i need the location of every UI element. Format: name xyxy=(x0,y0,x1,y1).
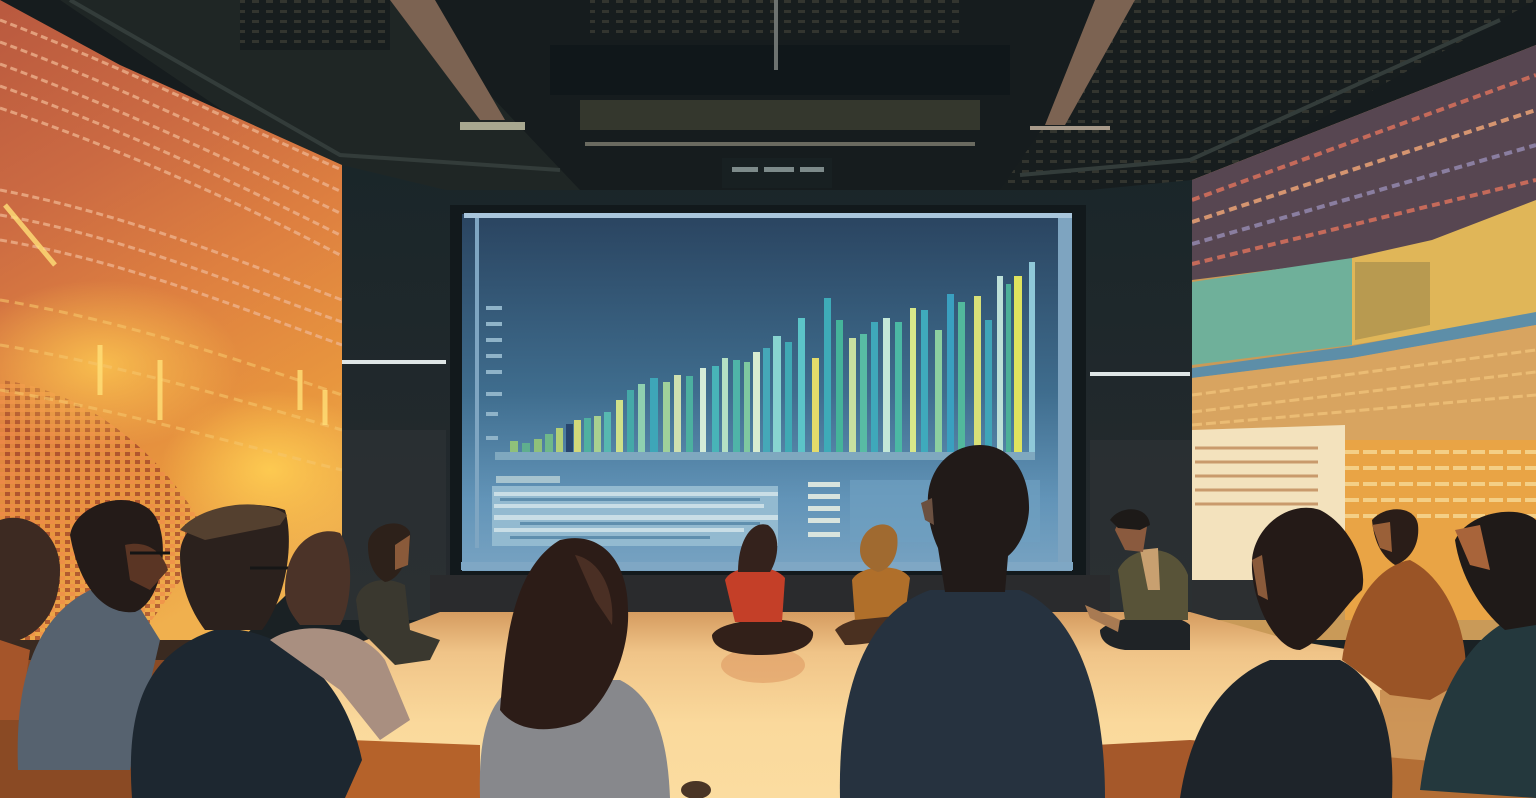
person: man with glasses and beard xyxy=(18,500,170,770)
person: man in brown jacket xyxy=(1342,509,1466,700)
left wall display xyxy=(0,0,380,660)
sign above the screen xyxy=(722,158,832,188)
floor xyxy=(0,575,1536,798)
person: seated woman in red xyxy=(712,524,813,683)
person: seated man on the left xyxy=(356,523,440,665)
presentation screen xyxy=(450,205,1086,580)
person: large man from behind xyxy=(840,445,1105,798)
person: woman with long hair from behind xyxy=(480,538,670,798)
right wall display xyxy=(1192,45,1536,640)
person: seated child in orange xyxy=(835,524,910,645)
data table panels xyxy=(492,476,1040,546)
person: man from behind in dark shirt xyxy=(131,504,362,798)
back wall pillars xyxy=(342,165,1192,620)
foreground object on floor xyxy=(681,781,711,798)
ceiling xyxy=(0,0,1536,210)
person: woman with hair bun at right xyxy=(1180,508,1392,798)
person: far left viewer xyxy=(0,518,60,720)
person: viewer at far right xyxy=(1420,512,1536,798)
bar chart xyxy=(486,262,1035,460)
person: presenter seated at right of screen xyxy=(1085,509,1190,650)
person: woman in tan top xyxy=(270,531,410,740)
